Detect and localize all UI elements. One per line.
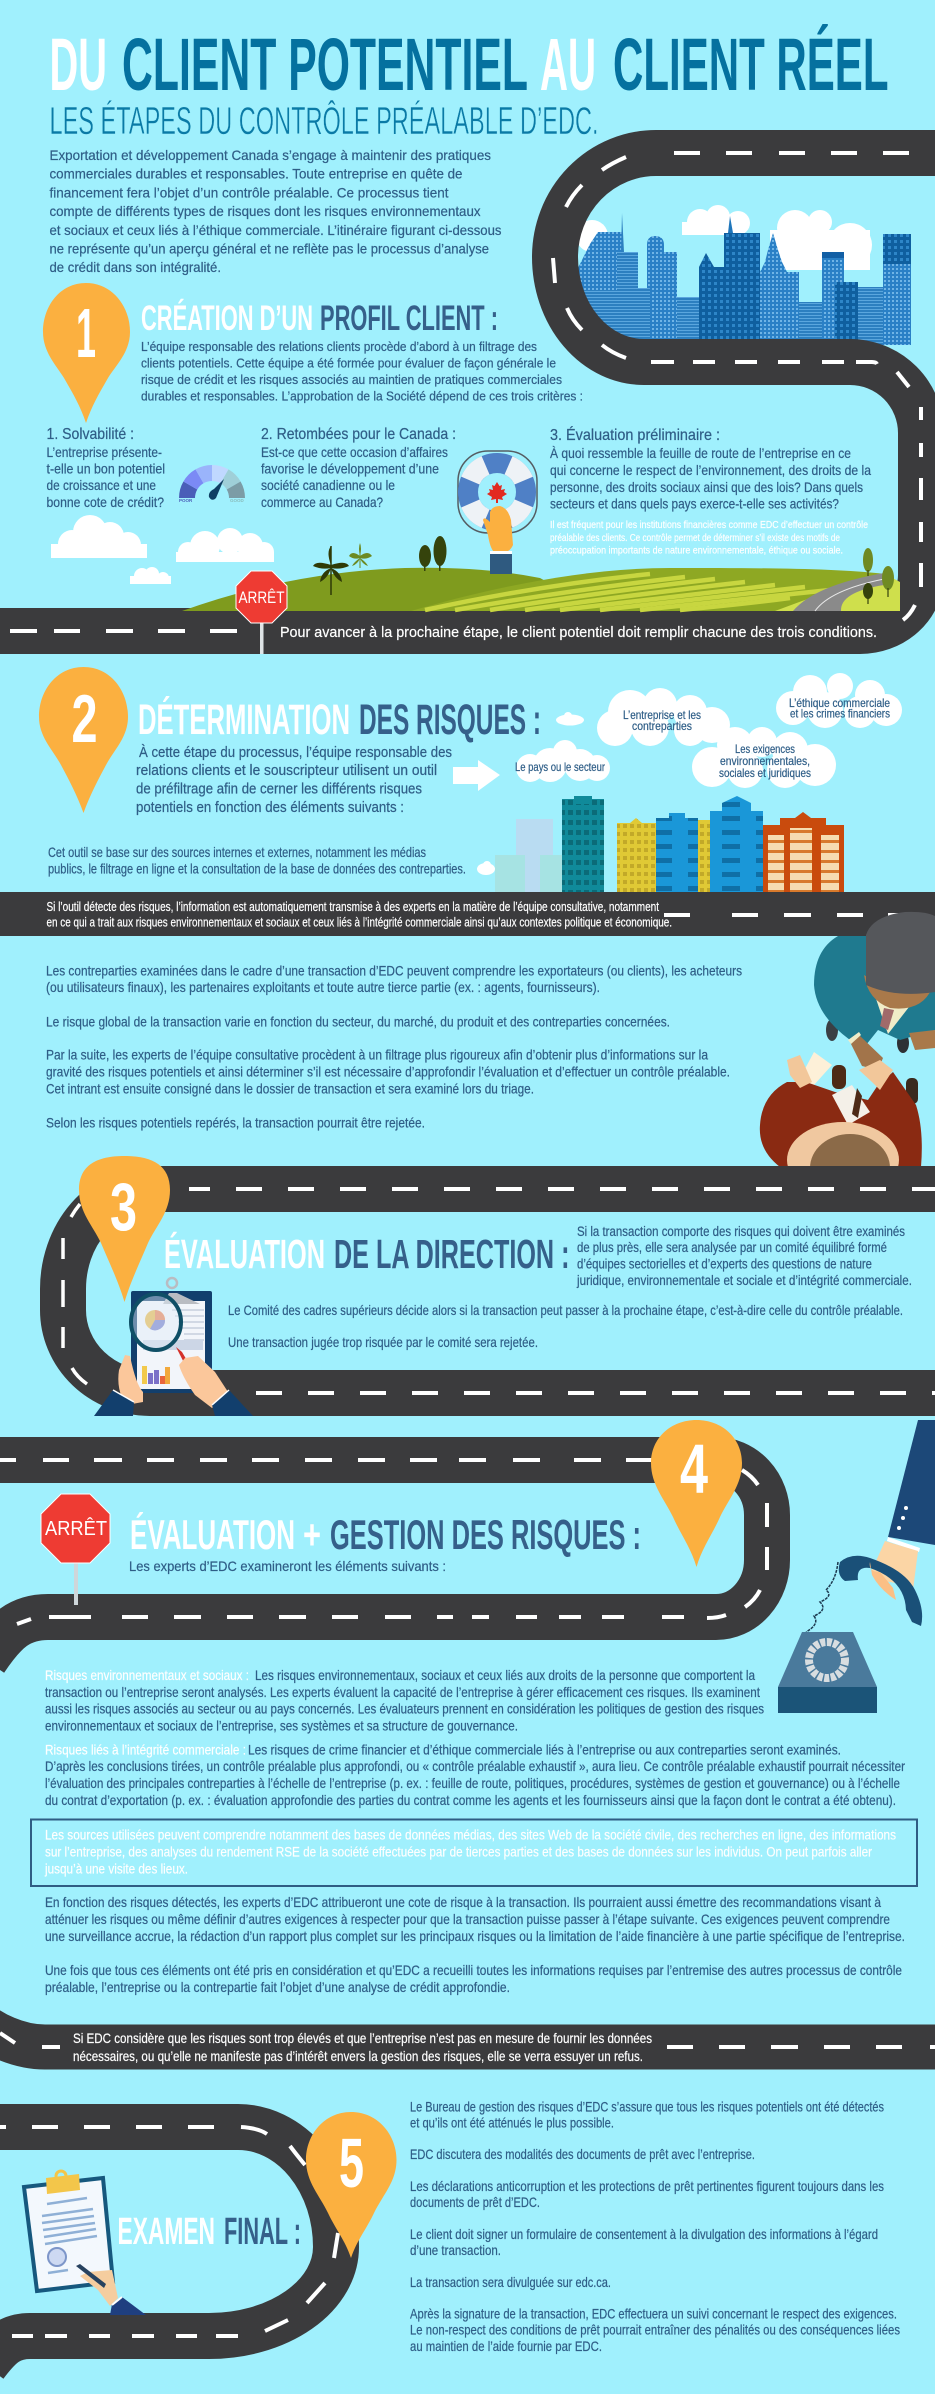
criterion 1: solvabilité: L’entreprise présente-	[46, 444, 162, 460]
text: étape 2: relations clients et le souscripteur utilisent un outil	[136, 762, 437, 779]
stop sign 2: ARRÊT	[45, 1517, 107, 1540]
risk clouds: Le pays ou le secteur	[515, 760, 605, 774]
text: cote de risque	[45, 1894, 905, 1995]
intro text: compte de différents types de risques dont les risques environnementaux	[50, 203, 480, 219]
risk clouds: contreparties	[632, 719, 692, 733]
text: comité des cadres: Une transaction jugée trop risquée par le comité sera rejetée.	[228, 1334, 538, 1350]
heading: évaluation de la direction	[164, 1231, 570, 1277]
callout: sources	[31, 1820, 917, 1886]
bottom man	[760, 1055, 930, 1202]
pin 1	[43, 283, 130, 423]
pin 1: 1	[76, 294, 96, 372]
intro text	[50, 147, 502, 275]
road text 3: Si EDC considère que les risques sont trop élevés et que l’entreprise n’est pas en mesure de fournir les données	[73, 2030, 652, 2046]
white note: préoccupation importants de nature environnementale, éthique ou sociale.	[550, 544, 843, 556]
intro text: financement fera l’objet d’un contrôle préalable. Ce processus tient	[50, 184, 449, 200]
risk clouds: sociales et juridiques	[719, 766, 811, 780]
pin 2: 2	[72, 681, 98, 757]
text: étape 2: potentiels en fonction des éléments suivants :	[136, 799, 404, 816]
text: étape 2: À cette étape du processus, l’équipe responsable des	[139, 744, 452, 761]
icon: credit gauge: GOOD	[230, 498, 245, 503]
pin 2	[39, 667, 128, 813]
risk clouds: Les exigences	[735, 742, 795, 756]
text: risques environnementaux et sociaux: aussi les risques associés au secteur ou au pays concernés. Les évaluateurs prennent en considération les politiques de gestion des risques	[45, 1700, 764, 1716]
text: sources de l'outil: Cet outil se base sur des sources internes et externes, notamment les médias	[48, 844, 426, 860]
top man	[814, 912, 935, 1070]
illustration: coloured buildings	[495, 796, 844, 892]
icon: credit gauge	[179, 473, 245, 503]
criterion 3: évaluation préliminaire: À quoi ressemble la feuille de route de l’entreprise en ce	[550, 445, 851, 461]
intro text: ne représente qu’un aperçu général et ne reflète pas le processus d’analyse	[50, 240, 489, 256]
text: contreparties et risque global: Le risque global de la transaction varie en fonction du secteur, du marché, du produit et des contreparties concernées.	[46, 1014, 670, 1030]
text: examen final: La transaction sera divulguée sur edc.ca.	[410, 2274, 611, 2290]
heading: examen final: EXAMEN	[118, 2211, 215, 2253]
illustration: handshake from above	[760, 912, 935, 1202]
criterion 3: évaluation préliminaire	[550, 425, 871, 512]
clouds	[51, 515, 274, 584]
text: examen final: EDC discutera des modalités des documents de prêt avec l’entreprise.	[410, 2146, 755, 2162]
illustration: clipboard and magnifier	[94, 1278, 253, 1416]
text: examen final: au maintien de l’aide fournie par EDC.	[410, 2338, 602, 2354]
text: comité des cadres	[228, 1302, 903, 1350]
icon: life ring held by a hand	[458, 451, 537, 574]
text: risques environnementaux et sociaux: Risques environnementaux et sociaux :	[45, 1667, 249, 1683]
text: éléments examinés: Les experts d’EDC examineront les éléments suivants :	[129, 1558, 446, 1574]
criterion 3: évaluation préliminaire: personne, des droits sociaux ainsi que des lois? Dans quels	[550, 479, 863, 495]
heading: évaluation de la direction: ÉVALUATION	[164, 1231, 325, 1277]
intro text: et sociaux et ceux liés à l’éthique commerciale. L’itinéraire figurant ci-dessous	[50, 222, 502, 238]
pin 3: 3	[110, 1169, 137, 1245]
text: risques environnementaux et sociaux: transaction ou l’entreprise seront analysés. Les experts évaluent la capacité de l’entreprise à gérer efficacement ces risques. Ils examinent	[45, 1684, 760, 1700]
criterion 1: solvabilité: bonne cote de crédit?	[46, 494, 164, 510]
criterion 2: retombées: 2. Retombées pour le Canada :	[261, 426, 456, 443]
illustration: hand with telephone	[778, 1420, 935, 1713]
heading: évaluation + gestion des risques: ÉVALUATION	[130, 1511, 295, 1558]
title: CLIENT POTENTIEL	[122, 23, 528, 106]
text: contreparties et risque global: gravité des risques potentiels et ainsi déterminer s’il est nécessaire d’approfondir l’évaluation et d’effectuer un contrôle préalable.	[46, 1064, 730, 1080]
intro text: Exportation et développement Canada s’engage à maintenir des pratiques	[50, 147, 491, 163]
road: first section	[0, 153, 935, 631]
icon: credit gauge: POOR	[179, 498, 193, 503]
text: contreparties et risque global: (ou utilisateurs finaux), les partenaires exploitants et toute autre tierce partie (ex. : agents, fournisseurs).	[46, 979, 600, 995]
paper	[799, 1052, 832, 1085]
intro text: commerciales durables et responsables. Toute entreprise en quête de	[50, 166, 463, 182]
text: analyse par un comité: d’équipes sectorielles et d’experts des questions de nature	[577, 1256, 872, 1272]
trees	[419, 536, 894, 604]
white note	[550, 519, 868, 556]
text: étape 1: risque de crédit et les risques associés au maintien de pratiques commerciales	[141, 372, 562, 387]
text: examen final: documents de prêt d’EDC.	[410, 2194, 540, 2210]
heading: détermination des risques: DÉTERMINATION	[138, 696, 350, 744]
text: analyse par un comité: de plus près, elle sera analysée par un comité équilibré formé	[577, 1240, 887, 1255]
text: étape 2	[136, 744, 452, 816]
callout: sources: jusqu’à une visite des lieux.	[44, 1860, 188, 1876]
text: contreparties et risque global: Selon les risques potentiels repérés, la transaction pourrait être rejetée.	[46, 1114, 425, 1130]
stop sign 2	[41, 1494, 110, 1605]
arrow	[453, 760, 500, 791]
risk clouds	[477, 673, 902, 875]
text: contreparties et risque global: Cet intrant est ensuite consigné dans le dossier de transaction et sera examiné lors du triage.	[46, 1080, 534, 1096]
heading: examen final: FINAL :	[224, 2211, 301, 2253]
risk clouds: L’entreprise et les	[623, 708, 701, 722]
text: contreparties et risque global	[46, 962, 742, 1130]
text: examen final: d’une transaction.	[410, 2242, 501, 2258]
text: étape 1: clients potentiels. Cette équipe a été formée pour évaluer de façon générale le	[141, 356, 556, 370]
text: étape 1	[141, 339, 583, 404]
criterion 1: solvabilité: t-elle un bon potentiel	[46, 460, 165, 476]
intro text: de crédit dans son intégralité.	[50, 259, 221, 275]
heading: création d'un profil client: PROFIL CLIENT :	[320, 299, 498, 338]
illustration: city skyline	[576, 205, 911, 345]
text: risques liés à l'intégrité commerciale: Les risques de crime financier et d’éthique commerciale liés à l’entreprise ou aux contreparties seront examinés.	[248, 1742, 841, 1758]
pin 3	[79, 1156, 170, 1302]
road: final section	[0, 2127, 338, 2365]
heading: création d'un profil client: CRÉATION D’UN	[141, 298, 313, 338]
road text 2: en ce qui a trait aux risques environnementaux et sociaux et ceux liés à l’intégrité commerciale ainsi qu’aux contextes politique et économique.	[46, 916, 672, 930]
clouds behind the city	[576, 205, 872, 270]
road text 1: Pour avancer à la prochaine étape, le client potentiel doit remplir chacune des trois conditions.	[280, 624, 877, 641]
criterion 2: retombées: société canadienne ou le	[261, 477, 395, 493]
pin 5	[306, 2112, 396, 2258]
pin 5: 5	[339, 2124, 364, 2202]
subtitle: LES ÉTAPES DU CONTRÔLE PRÉALABLE D’EDC.	[50, 99, 598, 143]
risk clouds: L’éthique commerciale	[789, 696, 890, 710]
text: étape 1: durables et responsables. L’approbation de la Société dépend de ces trois critères :	[141, 388, 583, 404]
criterion 1: solvabilité: 1. Solvabilité :	[46, 426, 134, 443]
text: examen final: et qu’ils ont été atténués le plus possible.	[410, 2114, 614, 2130]
criterion 3: évaluation préliminaire: 3. Évaluation préliminaire :	[550, 425, 720, 444]
text: analyse par un comité	[576, 1224, 912, 1288]
text: risques environnementaux et sociaux	[45, 1667, 764, 1734]
heading: évaluation + gestion des risques	[130, 1511, 641, 1558]
criterion 2: retombées: commerce au Canada?	[261, 494, 383, 510]
pin 4: 4	[680, 1430, 708, 1508]
title: DU	[50, 23, 107, 106]
text: cote de risque: préalable, l’entreprise ou la contrepartie fait l’objet d’une analyse de crédit approfondie.	[45, 1979, 510, 1995]
criterion 3: évaluation préliminaire: qui concerne le respect de l’environnement, des droits de la	[550, 462, 871, 478]
criterion 3: évaluation préliminaire: secteurs et dans quels pays exerce-t-elle ses activités?	[550, 496, 839, 512]
white note: préalable des clients. Ce contrôle permet de déterminer s’il existe des motifs de	[550, 532, 840, 544]
heading: évaluation de la direction: DE LA DIRECTION :	[334, 1231, 570, 1277]
text: contreparties et risque global: Par la suite, les experts de l’équipe consultative procèdent à un filtrage plus rigoureux afin d’obtenir plus d’informations sur la	[46, 1046, 708, 1062]
text: sources de l'outil: publics, le filtrage en ligne et la consultation de la base de données des contreparties.	[48, 860, 466, 876]
road text 3	[73, 2030, 652, 2064]
risk clouds: et les crimes financiers	[790, 706, 890, 720]
text: risques environnementaux et sociaux: Les risques environnementaux, sociaux et ceux liés aux droits de la personne que comportent la	[255, 1667, 755, 1683]
heading: détermination des risques: DES RISQUES :	[359, 696, 541, 744]
criterion 2: retombées: Est-ce que cette occasion d’affaires	[261, 444, 448, 460]
road: second section	[0, 892, 935, 936]
stop sign 1	[236, 571, 287, 654]
pin 4	[651, 1420, 742, 1567]
road: fourth section	[0, 1460, 767, 1660]
text: risques liés à l'intégrité commerciale	[45, 1742, 905, 1808]
criterion 1: solvabilité: de croissance et une	[46, 477, 156, 493]
text: sources de l'outil	[48, 844, 466, 876]
palm trees	[313, 543, 372, 595]
road text 2: Si l’outil détecte des risques, l’information est automatiquement transmise à des experts en la matière de l’équipe consultative, notamment	[46, 900, 659, 914]
text: risques liés à l'intégrité commerciale: Risques liés à l’intégrité commerciale :	[45, 1742, 246, 1758]
road text 3: nécessaires, ou qu’elle ne manifeste pas d’intérêt envers la gestion des risques, elle se verra essuyer un refus.	[73, 2048, 643, 2064]
title: AU	[540, 23, 596, 106]
road: fifth section	[0, 2015, 935, 2047]
text: étape 1: L’équipe responsable des relations clients procède d’abord à un filtrage des	[141, 339, 537, 354]
illustration: signed document	[24, 2171, 146, 2315]
road text 2	[46, 900, 672, 930]
heading: évaluation + gestion des risques: GESTION DES RISQUES :	[330, 1511, 641, 1558]
text: risques environnementaux et sociaux: environnementaux et sociaux de l’entreprise, ses systèmes et sa structure de gouvernance.	[45, 1718, 518, 1734]
white note: Il est fréquent pour les institutions financières comme EDC d’effectuer un contrôle	[550, 519, 868, 531]
risk clouds: environnementales,	[720, 754, 810, 768]
heading: évaluation + gestion des risques: +	[303, 1511, 321, 1558]
text: contreparties et risque global: Les contreparties examinées dans le cadre d’une transaction d’EDC peuvent comprendre les exportateurs (ou clients), les acheteurs	[46, 962, 742, 978]
stop sign 1: ARRÊT	[238, 588, 284, 607]
text: examen final	[410, 2098, 900, 2354]
road: third section	[63, 1189, 935, 1393]
criterion 2: retombées	[261, 426, 456, 510]
text: étape 2: de préfiltrage afin de cerner les différents risques	[136, 780, 422, 798]
criterion 1: solvabilité	[46, 426, 165, 510]
criterion 2: retombées: favorise le développement d’une	[261, 460, 439, 476]
landscape	[182, 536, 900, 611]
